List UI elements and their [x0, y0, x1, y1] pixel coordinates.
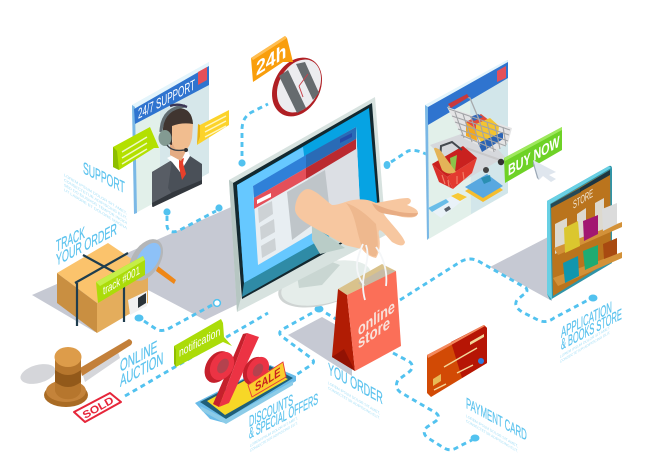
books	[564, 221, 580, 253]
text: support lorem: UT LABORE ET DOLORE MAGNA	[64, 188, 127, 231]
label: support: SUPPORT	[83, 159, 125, 198]
floor: bag shadow	[288, 317, 352, 376]
icon: ticket	[428, 193, 467, 218]
icon: yellow speech bubble	[197, 110, 229, 145]
tag: 24h: 24h	[256, 40, 286, 81]
headset	[161, 106, 185, 132]
barcode label	[128, 291, 147, 315]
monitor	[229, 97, 386, 316]
icon: support agent	[152, 105, 202, 207]
floor: book store shadow	[490, 236, 552, 301]
label: track your order: TRACK	[56, 223, 85, 256]
connector: support to clock	[238, 104, 268, 167]
icon: shopping basket	[432, 142, 477, 189]
panel: 24/7 support	[132, 62, 209, 214]
jacket	[152, 156, 202, 207]
tag: track #001	[96, 256, 145, 303]
hair	[163, 108, 193, 145]
icon: gavel	[18, 339, 132, 407]
stamp: sold: SOLD	[81, 395, 116, 422]
heading: 24/7 support: 24/7 SUPPORT	[138, 76, 195, 122]
icon: payment card	[427, 325, 487, 397]
connector: monitor to shop panel	[384, 150, 434, 169]
connector: track order	[134, 300, 220, 330]
label: you order: YOU ORDER	[328, 360, 383, 409]
text: support lorem	[64, 173, 127, 231]
icon: hand	[295, 189, 418, 258]
text: you order lorem: CONSECTETUR ADIPISCING ELIT.	[328, 386, 380, 421]
label: track your order	[56, 220, 117, 270]
label: online auction: ONLINE	[120, 338, 157, 376]
panel header	[428, 62, 508, 125]
label: application and books store	[561, 299, 622, 354]
label: discounts and special offers	[249, 391, 318, 443]
icon: green speech bubble	[113, 127, 159, 170]
monitor lower band	[242, 243, 320, 297]
back panels	[555, 218, 567, 254]
panel: shop	[425, 60, 508, 240]
icon: shopping bag: online	[358, 296, 395, 340]
handles	[357, 244, 386, 300]
icon: magnifier	[122, 233, 176, 287]
text: payment card lorem: LOREM IPSUM DOLOR SIT AMET,	[466, 414, 518, 449]
floor: monitor shadow	[32, 204, 238, 332]
tag: notification: notification	[179, 324, 220, 360]
icon: shopping cart	[447, 94, 512, 173]
icon: shopping bag	[332, 244, 401, 371]
text: payment card lorem: CONSECTETUR ADIPISCING ELIT.	[466, 419, 518, 454]
monitor bezel	[229, 97, 386, 312]
tag: sale: SALE	[255, 365, 281, 395]
text: support lorem: LOREM IPSUM DOLOR SIT AMET,	[64, 173, 127, 216]
label: discounts and special offers: & SPECIAL OFFERS	[249, 391, 318, 443]
tag: 24h	[251, 36, 293, 82]
monitor stand	[273, 252, 376, 316]
label: payment card: PAYMENT CARD	[466, 395, 527, 445]
icon: parcel box	[57, 243, 148, 333]
label: discounts and special offers: DISCOUNTS	[249, 391, 293, 431]
icon: folded shirt	[465, 174, 503, 202]
panel header	[134, 66, 209, 124]
stamp: sold	[74, 393, 121, 422]
browser window	[253, 127, 360, 265]
connector: discounts to bag	[280, 306, 336, 375]
connector: support to monitor	[163, 204, 223, 232]
connector: bag to payment card	[393, 353, 480, 450]
tag: track #001: track #001	[103, 262, 140, 298]
heading: store: STORE	[573, 187, 593, 212]
shelves	[554, 222, 622, 255]
text: discounts lorem: CONSECTETUR ADIPISCING ELIT.	[250, 421, 298, 453]
icon: tablet book store	[547, 166, 622, 300]
label: application and books store: APPLICATION	[561, 299, 612, 342]
label: online auction: AUCTION	[120, 350, 163, 391]
connector: auction to monitor	[125, 313, 268, 396]
text: you order lorem: LOREM IPSUM DOLOR SIT AMET,	[328, 381, 380, 416]
label: track your order: YOUR ORDER	[56, 220, 117, 270]
icon: clock	[262, 49, 332, 125]
text: books lorem: LOREM IPSUM DOLOR SIT AMET,	[560, 325, 610, 359]
text: books lorem: CONSECTETUR ADIPISCING ELIT,	[560, 330, 610, 364]
text: support lorem: SED DO EIUSMOD TEMPOR INCIDI	[64, 183, 127, 225]
face	[172, 123, 193, 152]
text: discounts lorem: LOREM IPSUM DOLOR SIT AMET,	[250, 416, 298, 448]
button: buy now: BUY NOW	[508, 133, 560, 180]
icon: cursor	[533, 160, 556, 182]
icon: discount phone	[195, 333, 296, 424]
connector: bag to book store	[400, 259, 598, 322]
percent sign	[199, 333, 274, 407]
icon: shopping bag: store	[358, 312, 390, 353]
text: support lorem: CONSECTETUR ADIPISCING ELIT,	[64, 178, 127, 221]
monitor screen	[237, 108, 378, 283]
browser thumbnails	[258, 201, 276, 258]
